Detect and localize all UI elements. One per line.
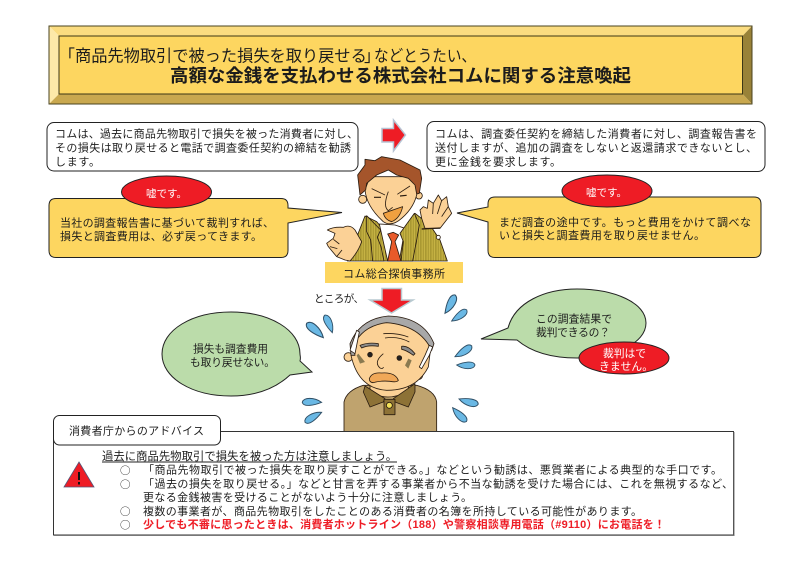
salesman left hand	[327, 226, 362, 261]
text box: right explanation: 更に金銭を要求します。	[435, 156, 561, 168]
text box: right explanation: コムは、調査委任契約を締結した消費者に対し、調査報告書を	[435, 126, 757, 140]
speech callout: left	[49, 198, 342, 258]
advice heading: 過去に商品先物取引で損失を被った方は注意しましょう。	[102, 449, 397, 463]
badge: no trial	[579, 342, 669, 374]
speech callout: left: 損失と調査費用は、必ず戻ってきます。	[60, 229, 262, 243]
title line 1: などとうたい、	[374, 48, 476, 66]
icon: warning triangle	[64, 462, 94, 487]
text box: left explanation: します。	[55, 156, 100, 168]
badge: false left: 嘘です。	[146, 187, 187, 200]
advice list	[120, 462, 733, 532]
advice list: ○	[120, 463, 130, 478]
elderly man head	[344, 316, 434, 390]
elderly man body	[344, 385, 437, 434]
advice list: 複数の事業者が、商品先物取引をしたことのある消費者の名簿を所持している可能性があります。	[143, 504, 642, 518]
elderly man collar	[363, 380, 415, 415]
arrow: right	[382, 120, 406, 151]
arrow: down	[370, 288, 413, 313]
icons: sweat drops	[302, 293, 479, 425]
title line 1: 」	[364, 48, 380, 66]
salesman shirt and tie	[367, 213, 419, 261]
text box: right explanation	[427, 122, 765, 172]
title line 2: 高額な金銭を支払わせる株式会社コムに関する注意喚起	[170, 65, 632, 86]
caption: however: ところが、	[314, 292, 364, 305]
salesman right hand	[420, 195, 452, 239]
speech callout: right: いと損失と調査費用を取り戻せません。	[499, 228, 705, 242]
title banner	[49, 26, 752, 104]
label: company name: コム総合探偵事務所	[343, 266, 445, 280]
speech bubble: right green question	[481, 289, 646, 358]
illustration: salesman	[327, 157, 452, 261]
badge: false right	[562, 175, 652, 207]
speech callout: right	[457, 197, 761, 258]
tab: advice heading: 消費者庁からのアドバイス	[69, 424, 204, 438]
speech bubble: left green	[162, 312, 312, 396]
advice list: 「過去の損失を取り戻せる。」などと甘言を弄する事業者から不当な勧誘を受けた場合には、これを無視するなど、	[143, 476, 733, 490]
advice list: 少しでも不審に思ったときは、消費者ホットライン（188）や警察相談専用電話（#9110）にお電話を！	[143, 517, 665, 531]
text box: left explanation	[47, 122, 358, 171]
speech callout: right: まだ調査の途中です。もっと費用をかけて調べな	[499, 215, 751, 229]
speech bubble: right green question: 裁判できるの？	[536, 326, 610, 339]
panel: consumer agency advice	[54, 416, 734, 536]
badge: no trial: 裁判はで	[603, 347, 646, 360]
salesman head	[358, 157, 422, 224]
badge: false left	[122, 176, 212, 208]
text box: left explanation: コムは、過去に商品先物取引で損失を被った消費者に対し、	[55, 126, 358, 140]
salesman suit	[347, 213, 447, 261]
badge: false right: 嘘です。	[586, 186, 627, 199]
label: company name	[325, 262, 463, 283]
advice list: ○	[120, 477, 130, 492]
advice list: ○	[120, 518, 130, 532]
advice list: ○	[120, 504, 130, 519]
illustration: worried elderly man	[344, 316, 437, 434]
speech callout: left: 当社の調査報告書に基づいて裁判すれば、	[60, 216, 274, 230]
speech bubble: left green: 損失も調査費用	[193, 342, 268, 356]
speech bubble: left green: も取り戻せない。	[190, 357, 275, 369]
speech bubble: right green question: この調査結果で	[536, 312, 612, 326]
tab: advice heading	[54, 416, 220, 445]
title line 1: 「商品先物取引で被った損失を取り戻せる	[59, 48, 367, 66]
text box: left explanation: その損失は取り戻せると電話で調査委任契約の締結を勧誘	[55, 140, 351, 154]
badge: no trial: きません。	[599, 360, 653, 373]
advice list: 「商品先物取引で被った損失を取り戻すことができる。」などという勧誘は、悪質業者による典型的な手口です。	[143, 462, 722, 476]
advice list: 更なる金銭被害を受けることがないよう十分に注意しましょう。	[143, 490, 472, 504]
text box: right explanation: 送付しますが、追加の調査をしないと返還請求できないとし、	[435, 140, 757, 154]
